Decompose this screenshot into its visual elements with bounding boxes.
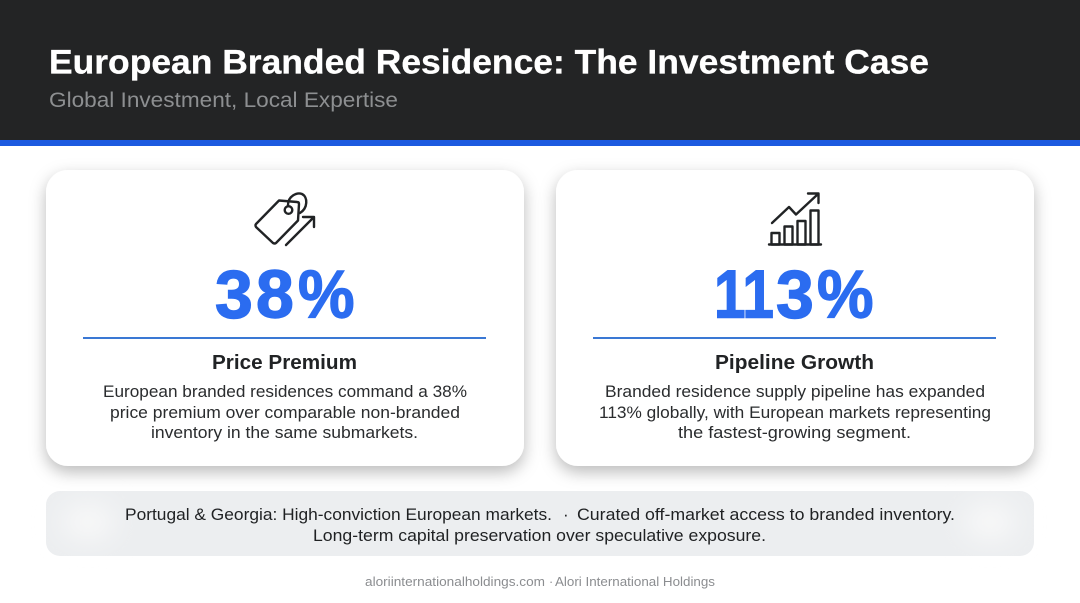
callout: market summary: Long-term capital preservation over speculative exposure. xyxy=(313,526,766,545)
icon: price tag with arrow xyxy=(256,193,314,245)
big number: 38%: 8 xyxy=(256,256,294,332)
footer: · xyxy=(549,575,553,589)
big number: 113%: 11 xyxy=(714,256,774,332)
big number: 38%: % xyxy=(298,256,354,332)
footer: aloriinternationalholdings.com xyxy=(365,575,545,589)
callout: market summary xyxy=(46,491,1034,556)
callout: market summary: Portugal & Georgia: High-conviction European markets. xyxy=(125,505,552,524)
panel: price premium xyxy=(46,170,524,466)
big number: 113%: % xyxy=(817,256,874,332)
heading: pipeline growth: Pipeline Growth xyxy=(715,351,874,374)
description: price premium: European branded residences command a 38% xyxy=(103,382,467,401)
panel: pipeline growth xyxy=(556,170,1034,466)
heading: price premium: Price Premium xyxy=(212,351,357,374)
icon: bar chart with arrow xyxy=(769,194,821,244)
description: price premium xyxy=(103,382,467,442)
description: price premium: price premium over comparable non-branded xyxy=(110,403,460,422)
description: pipeline growth: 113% globally, with European markets representing xyxy=(599,403,991,422)
big number: 113%: 3 xyxy=(776,256,814,332)
footer: Alori International Holdings xyxy=(555,575,715,589)
callout: market summary: · xyxy=(563,505,569,524)
description: pipeline growth: the fastest-growing segment. xyxy=(678,423,911,442)
subtitle: Global Investment, Local Expertise xyxy=(49,88,398,112)
header band xyxy=(0,0,1080,146)
callout: market summary: Curated off-market access to branded inventory. xyxy=(577,505,955,524)
big number: 38%: 3 xyxy=(215,256,253,332)
title: European Branded Residence: The Investment Case xyxy=(49,44,929,82)
description: pipeline growth xyxy=(599,382,991,442)
description: price premium: inventory in the same submarkets. xyxy=(151,423,418,442)
description: pipeline growth: Branded residence supply pipeline has expanded xyxy=(605,382,985,401)
